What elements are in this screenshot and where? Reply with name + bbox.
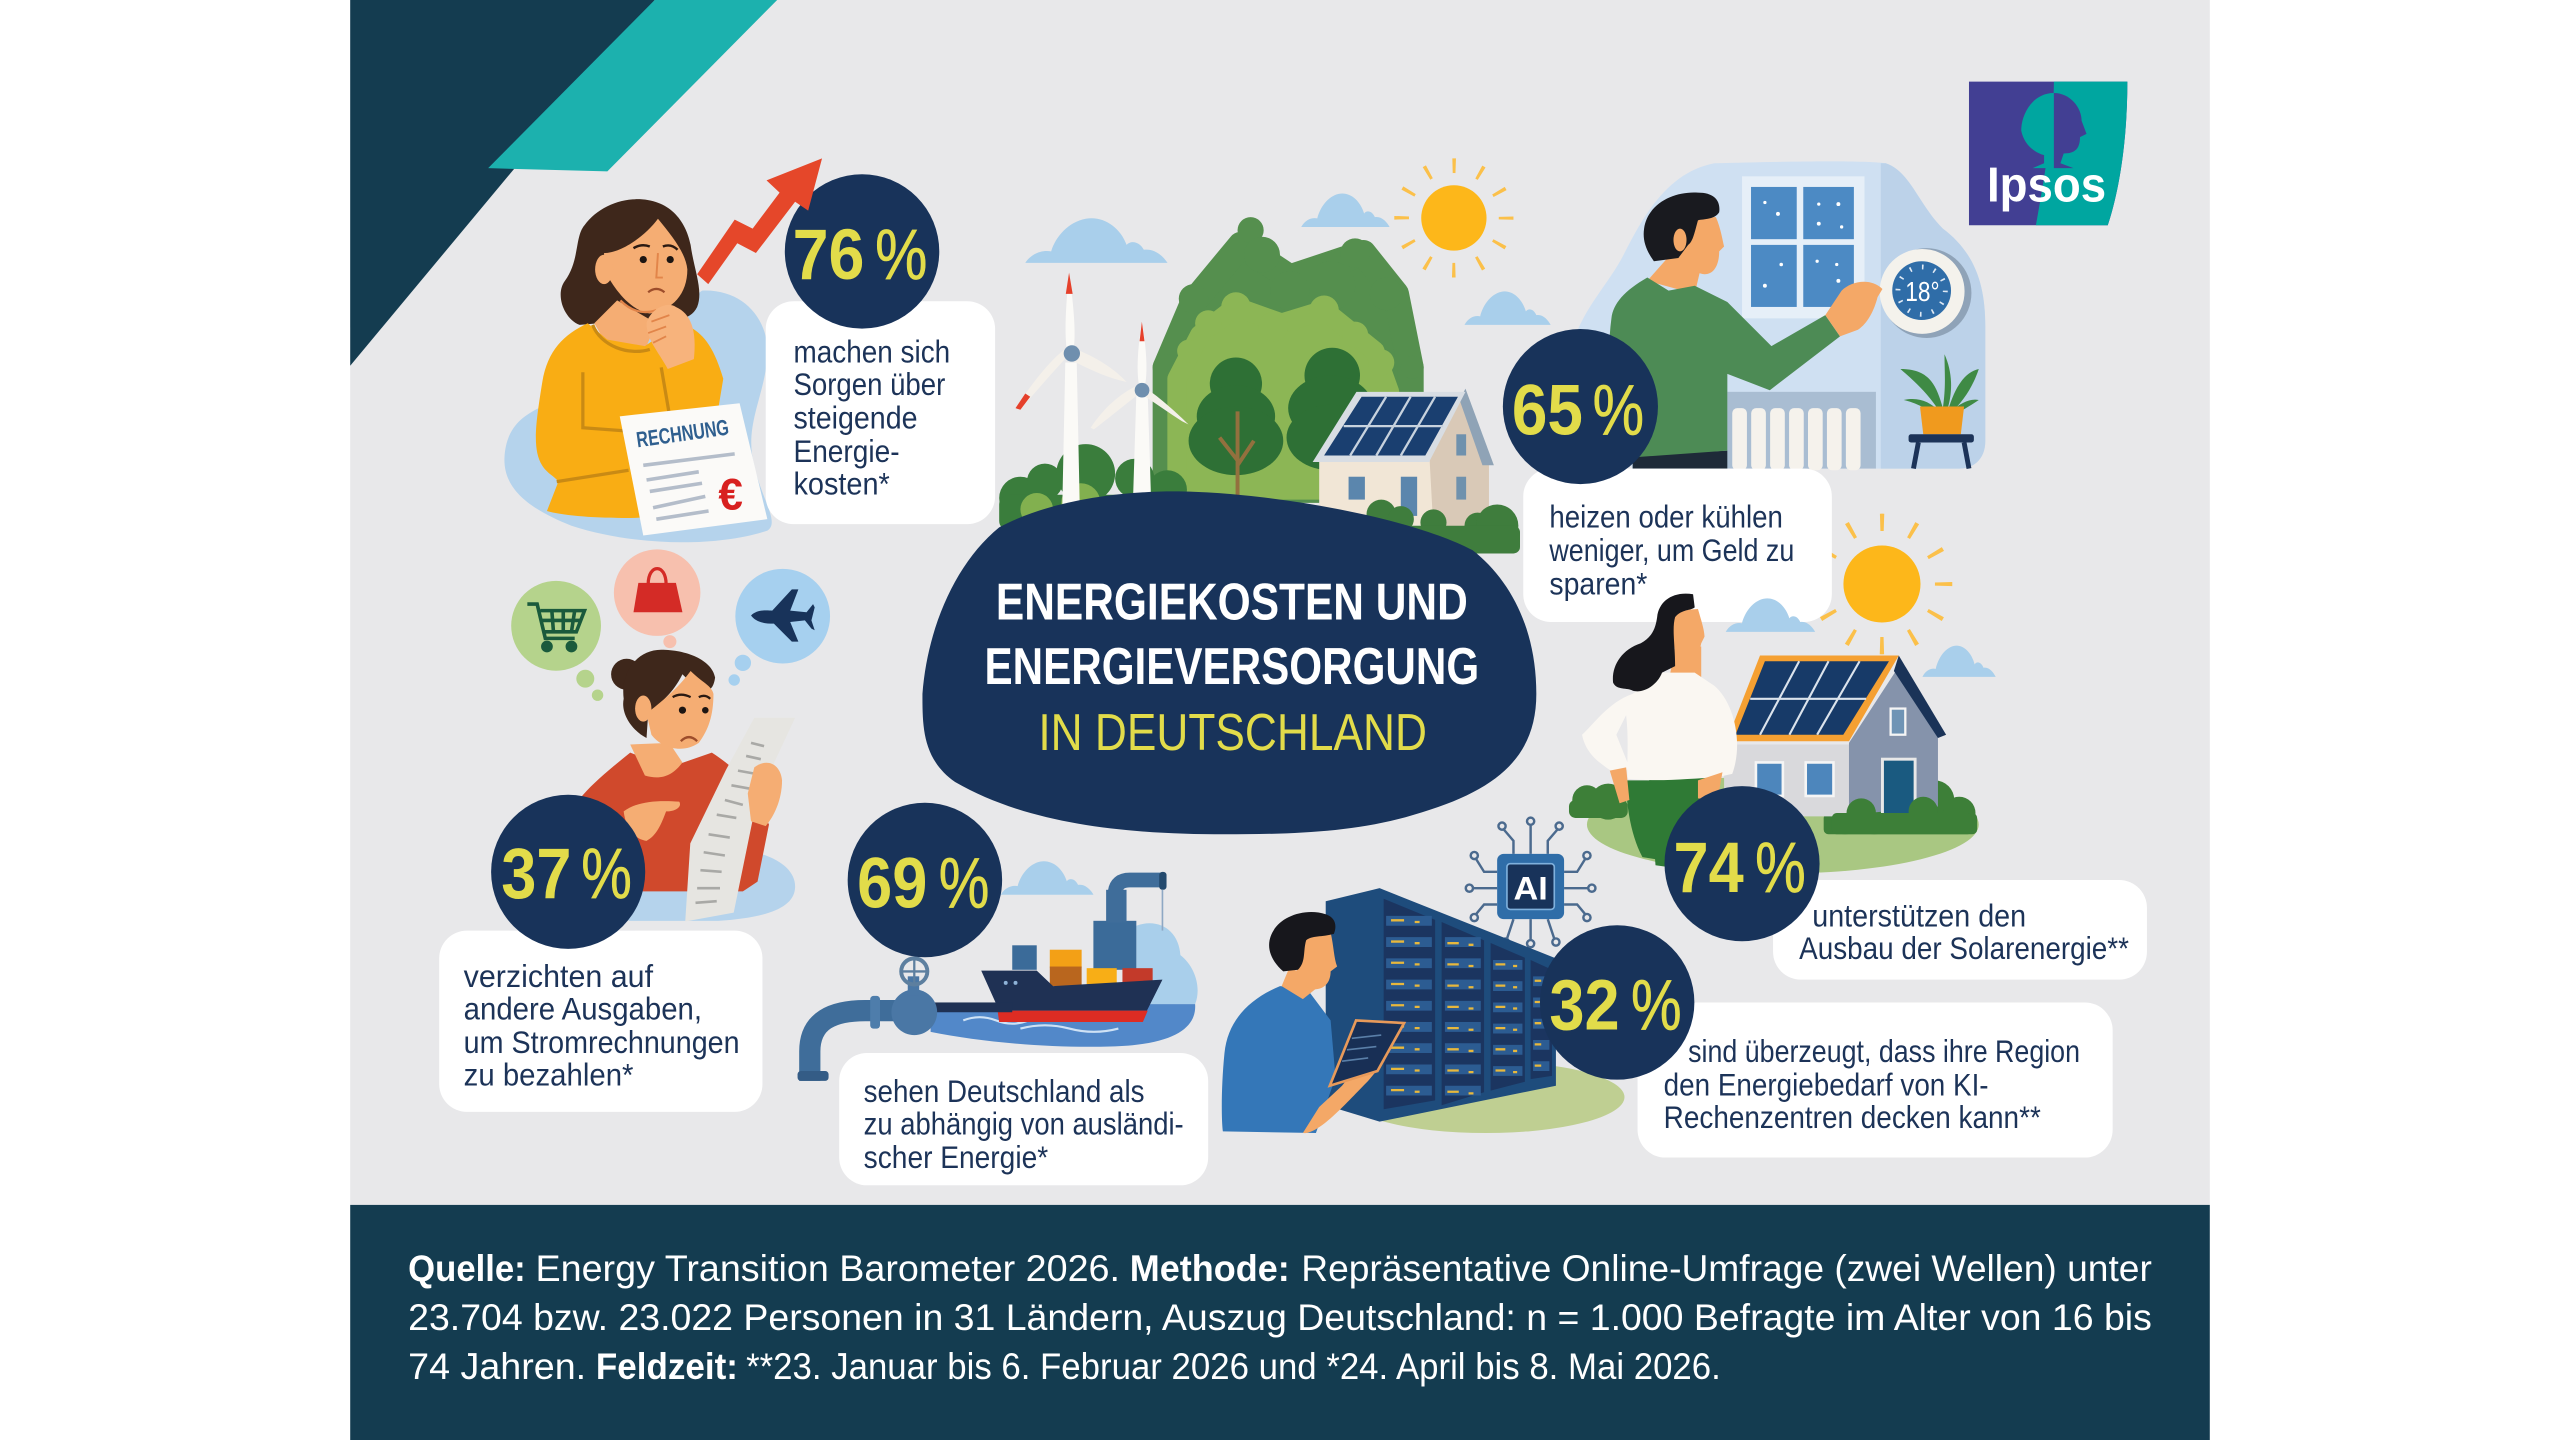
illustration: thoughts about other spending — [511, 549, 830, 921]
AI chip — [1466, 818, 1595, 947]
badge: 65 percent: 65 — [1512, 370, 1583, 450]
text box: 69 percent — [839, 1053, 1208, 1185]
bushes — [1569, 780, 1977, 834]
text box: 32 percent: den Energiebedarf von KI- — [1664, 1067, 1989, 1103]
sun — [1402, 166, 1506, 270]
title — [984, 574, 1479, 762]
text box: 69 percent: scher Energie* — [864, 1139, 1048, 1175]
right bushes — [1349, 500, 1520, 553]
blue base — [620, 847, 795, 921]
badge: 32 percent — [1540, 925, 1694, 1080]
text box: 37 percent: um Stromrechnungen — [464, 1024, 740, 1060]
server racks — [1326, 888, 1556, 1122]
AI chip: AI — [1513, 870, 1548, 907]
back trees — [1153, 217, 1424, 490]
title: ENERGIEKOSTEN UND — [996, 574, 1468, 632]
icon: red rising arrow — [697, 158, 822, 284]
badge: 37 percent: 37 — [501, 834, 571, 914]
text box: 76 percent: Sorgen über — [793, 366, 946, 402]
text box: 65 percent: weniger, um Geld zu — [1549, 532, 1794, 568]
radiator — [1727, 392, 1876, 469]
badge: 74 percent: 74 — [1673, 828, 1744, 908]
text box: 65 percent — [1523, 469, 1832, 622]
background panel — [350, 0, 2210, 1205]
text box: 65 percent: heizen oder kühlen — [1549, 498, 1783, 534]
receipt — [685, 718, 795, 921]
footer: source and method: **23. Januar bis 6. Februar 2026 und *24. April bis 8. Mai 2026. — [746, 1346, 1721, 1387]
clouds — [1025, 193, 1551, 325]
ground — [1587, 776, 1979, 873]
footer: source and method: 23.704 bzw. 23.022 Personen in 31 Ländern, Auszug Deutschland: n = 1.000 Befragte im Alter von 16 bis — [408, 1297, 2152, 1338]
text box: 74 percent — [1773, 880, 2147, 980]
badge: 65 percent: % — [1593, 370, 1644, 450]
thought dots — [576, 635, 751, 701]
title: ENERGIEVERSORGUNG — [984, 638, 1479, 696]
text box: 69 percent: zu abhängig von ausländi- — [864, 1106, 1184, 1142]
sun behind text box — [1820, 522, 1944, 646]
text box: 74 percent: Ausbau der Solarenergie** — [1799, 930, 2129, 966]
badge: 74 percent — [1664, 786, 1820, 941]
badge: 76 percent: % — [875, 215, 927, 295]
badge: 32 percent: 32 — [1549, 965, 1620, 1045]
illustration: wind turbines, trees and house — [999, 166, 1551, 553]
badge: 65 percent — [1503, 329, 1658, 484]
footer: source and method — [350, 1205, 2210, 1440]
text box: 37 percent — [439, 931, 762, 1112]
footer: source and method: Methode: — [1130, 1248, 1290, 1289]
house — [1319, 462, 1489, 526]
badge: 37 percent: % — [581, 834, 632, 914]
badge: 69 percent: 69 — [857, 844, 927, 924]
illustration: worried woman with bill — [504, 199, 772, 542]
corner shape: teal — [488, 0, 777, 171]
badge: 76 percent — [785, 174, 939, 329]
illustration: pipeline and cargo ship — [798, 861, 1198, 1081]
bubble: airplane — [735, 569, 830, 664]
text box: 65 percent: sparen* — [1549, 565, 1647, 601]
house — [1724, 744, 1851, 816]
footer: source and method: Repräsentative Online-Umfrage (zwei Wellen) unter — [1301, 1248, 2152, 1289]
window — [1742, 176, 1864, 318]
footer: source and method: Quelle: — [408, 1248, 526, 1289]
badge: 69 percent — [848, 803, 1002, 957]
text box: 37 percent: andere Ausgaben, — [464, 991, 702, 1027]
bubble: shopping bag — [614, 549, 700, 636]
title: IN DEUTSCHLAND — [1038, 704, 1427, 762]
text box: 76 percent: steigende — [793, 400, 918, 436]
thermostat: 18° — [1905, 276, 1940, 307]
water — [931, 1004, 1195, 1047]
illustration: worried woman with bill: € — [718, 470, 743, 519]
woman — [1626, 777, 1714, 873]
clouds — [1001, 861, 1198, 1004]
badge: 32 percent: % — [1631, 965, 1682, 1045]
footer: source and method: Energy Transition Barometer 2026. — [536, 1248, 1120, 1289]
turbine 1 — [1016, 273, 1127, 519]
text box: 37 percent: zu bezahlen* — [464, 1057, 633, 1093]
illustration: data centre with AI chip — [1222, 818, 1624, 1133]
text box: 32 percent — [1638, 1002, 2113, 1158]
technician — [1222, 912, 1404, 1133]
bubble: shopping cart — [511, 581, 601, 671]
man — [1633, 451, 1727, 469]
badge: 74 percent: % — [1755, 828, 1806, 908]
footer: source and method: Feldzeit: — [596, 1346, 738, 1387]
badge: 76 percent: 76 — [793, 215, 864, 295]
corner shape: dark — [350, 0, 655, 366]
bushes left — [999, 444, 1187, 531]
illustration: man adjusting thermostat — [1571, 161, 1985, 470]
central title blob — [922, 491, 1536, 834]
text box: 76 percent — [766, 301, 995, 524]
text box: 74 percent: unterstützen den — [1812, 898, 2026, 934]
text box: 37 percent: verzichten auf — [464, 958, 653, 994]
turbine 2 — [1091, 322, 1189, 498]
text box: 76 percent: machen sich — [793, 333, 950, 369]
logo: Ipsos: Ipsos — [1987, 159, 2106, 213]
dark trees — [1189, 348, 1375, 475]
text box: 32 percent: sind überzeugt, dass ihre Region — [1688, 1033, 2080, 1069]
illustration: woman with solar house — [1569, 594, 1996, 873]
thermostat — [1880, 248, 1971, 338]
faucet — [810, 1011, 914, 1081]
badge: 69 percent: % — [939, 844, 989, 924]
ship — [1093, 921, 1136, 970]
clouds — [1726, 598, 1996, 677]
logo: Ipsos — [1969, 82, 2127, 225]
plant — [1900, 354, 1979, 469]
text box: 69 percent: sehen Deutschland als — [864, 1073, 1144, 1109]
footer: source and method: 74 Jahren. — [408, 1346, 586, 1387]
badge: 37 percent — [491, 795, 645, 949]
text box: 32 percent: Rechenzentren decken kann** — [1664, 1099, 2041, 1135]
text box: 76 percent: kosten* — [793, 466, 890, 502]
text box: 76 percent: Energie- — [793, 433, 900, 469]
woman in red — [562, 753, 769, 891]
illustration: worried woman with bill: RECHNUNG — [635, 415, 730, 452]
